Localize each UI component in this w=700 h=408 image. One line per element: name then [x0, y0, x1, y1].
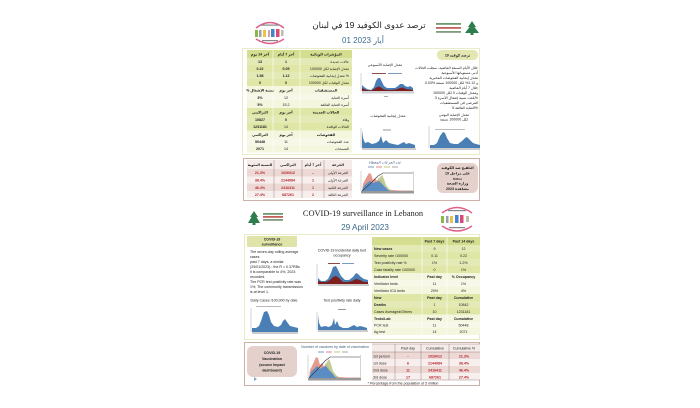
text block: Arabic summary: المرضى في المستشفيات	[440, 101, 478, 105]
table: English indicators: 1	[434, 303, 436, 307]
table: English indicators: Tests/Lab	[374, 317, 391, 321]
table: Arabic indicators: 1.12	[282, 74, 290, 78]
chart: incidence and severity: occupancy	[333, 254, 351, 258]
table: English indicators: 0	[434, 268, 436, 272]
Arabic report date: 01 أيار 2023	[342, 35, 384, 45]
table: English indicators: Ag test	[374, 330, 385, 334]
heading: COVID-19 surveillance: COVID-19	[264, 238, 280, 242]
chart: incidence and severity: COVID-19 Incidental daily bed	[318, 248, 366, 252]
table: Arabic indicators: 0	[259, 81, 261, 85]
table: Arabic indicators: حالات جديدة	[330, 60, 349, 64]
table: Arabic vaccination doses	[247, 160, 352, 198]
text block: Arabic summary: خلال الأيام السبعة الماضية، سجلت الحالات	[415, 65, 478, 71]
table: vaccination doses: 38.4%	[459, 362, 470, 366]
text block: English summary: it is comparable to 4%, 2023	[250, 270, 295, 274]
table: Arabic indicators: 0	[285, 81, 287, 85]
table: Arabic indicators: آخر 7 أيام	[278, 52, 295, 56]
text block: English summary: cases	[250, 255, 260, 259]
table: Arabic vaccination doses: الجرعة الثانية	[328, 186, 348, 190]
text block: Arabic summary: العناية الفائقة 5%	[452, 106, 479, 110]
table: Arabic indicators: آخر يوم	[279, 88, 293, 92]
text block: Arabic summary: أدنى مستوياتها الأسبوعية	[441, 70, 478, 75]
table: Arabic vaccination doses: التراكمي	[280, 163, 296, 167]
chart: Arabic vaccination doses	[361, 160, 414, 194]
chart: number of vaccines: Number of vaccines by date of vaccination	[301, 345, 369, 349]
table: English indicators: 9	[434, 247, 436, 251]
callout: COVID-19 vaccination: (source Impact	[259, 363, 286, 367]
callout: Arabic vaccination: مشاهدة 2023	[446, 187, 469, 191]
table: Arabic vaccination doses: 2	[312, 193, 314, 197]
table: Arabic indicators: أسرة العناية	[331, 95, 349, 100]
table: vaccination doses	[372, 344, 480, 380]
table: Arabic indicators	[246, 50, 352, 152]
table: English indicators: New cases	[374, 247, 392, 251]
table: Arabic indicators: التراكمي	[252, 133, 268, 137]
panel: Arabic surveillance	[242, 48, 480, 154]
table: Arabic vaccination doses: 38.4%	[255, 178, 266, 182]
table: vaccination doses: 11	[406, 368, 410, 372]
table: Arabic vaccination doses: 21.3%	[255, 171, 266, 175]
table: Arabic indicators: عدد الفحوصات	[327, 140, 349, 144]
table: English indicators: 0.22	[460, 254, 467, 258]
text block: English summary: The seven-day rolling average	[250, 250, 298, 254]
chart: daily cases Arabic	[429, 113, 480, 150]
table: Arabic indicators: 1	[285, 60, 287, 64]
table: Arabic vaccination doses: الجرعة الأولى	[328, 178, 348, 182]
table: Arabic indicators: الحالات الجديدة	[313, 110, 339, 114]
table: Arabic indicators: المسحات	[335, 147, 349, 151]
chart: incidence and severity Arabic	[361, 62, 414, 97]
table: vaccination doses: 6	[407, 362, 409, 366]
callout: Arabic vaccination: 19 على مراحل	[445, 172, 471, 176]
text block: English summary: recorded.	[250, 275, 265, 279]
table: Arabic indicators: 14	[284, 147, 288, 151]
table: English indicators: 14	[432, 330, 436, 334]
table: English indicators: 1231181	[457, 310, 470, 314]
chart: daily cases per 100,000: Daily Cases /100,000 by date	[251, 298, 297, 302]
table: vaccination doses: 1026012	[428, 354, 442, 358]
table: English indicators: 0.11	[431, 254, 438, 258]
table: English indicators: 1%	[432, 261, 438, 265]
table: Arabic indicators: آخر 14 يوم	[251, 52, 270, 56]
table: English indicators: Case fatality rate /100000	[374, 268, 415, 272]
table: vaccination doses: 1st person	[373, 354, 390, 358]
table: English indicators: 1.2%	[459, 261, 468, 265]
table: English indicators: Ventilator beds	[374, 282, 398, 286]
callout: COVID-19 vaccination: COVID-19	[264, 351, 280, 355]
table: Arabic vaccination doses: 687261	[282, 193, 294, 197]
date: English: 29 April 2023	[341, 223, 389, 232]
text block: Arabic summary	[415, 65, 479, 110]
table: English indicators: 50448	[458, 324, 468, 328]
table: Arabic indicators: 0	[285, 118, 287, 122]
table: Arabic vaccination doses: النسبة المئوية	[248, 163, 272, 167]
table: Arabic indicators: 0.05	[282, 67, 290, 71]
table: English indicators: Past 7 days	[425, 240, 444, 244]
table: English indicators: 2071	[460, 330, 468, 334]
table: English indicators: Past day	[427, 275, 442, 279]
table: Arabic indicators: 12	[284, 96, 288, 100]
table: vaccination doses: Past day	[401, 346, 415, 350]
table: Arabic indicators: 10827	[255, 118, 265, 122]
callout: Arabic vaccination	[437, 163, 478, 193]
chart: number of vaccines	[301, 345, 369, 380]
table: Arabic vaccination doses: 1	[312, 178, 314, 182]
table: English indicators: Past day	[427, 317, 442, 321]
text block: English summary: (29/01/2023) : the R = 0.37RBs	[250, 265, 300, 269]
callout: COVID-19 vaccination: dashboard)	[262, 368, 283, 372]
logo: campaign oval top	[255, 22, 284, 44]
table: Arabic indicators: معدل الإصابة لكل 100000	[310, 67, 349, 72]
panel: English vaccination	[244, 342, 480, 386]
text block: English summary	[250, 250, 303, 294]
table: English indicators: Cases Averaged/Others	[374, 310, 412, 314]
table: Arabic vaccination doses: 46.4%	[255, 186, 266, 190]
table: vaccination doses: 2nd dose	[373, 368, 388, 372]
table: Arabic vaccination doses: –	[312, 171, 314, 175]
table: vaccination doses: 21.3%	[459, 354, 470, 358]
panel: Arabic vaccination	[244, 158, 480, 200]
table: vaccination doses: 687261	[429, 376, 441, 380]
table: English indicators: Past 14 days	[453, 240, 474, 244]
table: English indicators: 4%	[461, 289, 467, 293]
table: vaccination doses: 27.4%	[459, 376, 470, 380]
Arabic report title: ترصد عدوى الكوفيد 19 في لبنان	[312, 20, 426, 30]
table: English indicators: Test positivity rate %	[374, 261, 408, 265]
callout: COVID-19 vaccination: Vaccination	[262, 357, 282, 361]
heading: Arabic COVID-19 surveillance pill: ترصد كوفيد 19	[445, 54, 471, 58]
chart: positivity rate Arabic	[361, 114, 416, 150]
text block: English summary: 1%; The community transmission	[250, 285, 303, 289]
text block: English summary: is at level 1.	[250, 290, 269, 294]
footnote: * Percentage from the population of 5 million	[368, 382, 438, 386]
table: Arabic indicators: معدل إيجابية الفحوصات %	[310, 74, 350, 79]
callout: Arabic vaccination: منصة	[453, 176, 462, 180]
table: Arabic indicators: أسرة العناية الفائقة	[320, 102, 349, 107]
table: Arabic vaccination doses: الجرعة الأولى	[328, 170, 348, 175]
table: English indicators: 1%	[461, 268, 467, 272]
table: Arabic vaccination doses: الجرعة الثالثة	[328, 193, 348, 197]
table: vaccination doses: 46.4%	[459, 368, 470, 372]
chart: daily cases Arabic: معدل الإصابة اليومي	[439, 113, 469, 118]
title: English: COVID-19 surveillance in Lebanon	[303, 209, 424, 218]
text block: Arabic summary: معدل إيجابية الفحوصات المخبرية	[429, 76, 478, 81]
chart: test positivity: Test positivity rate daily	[324, 298, 361, 302]
table: English indicators: 10	[432, 310, 436, 314]
table: Arabic indicators: المؤشرات الوبائية	[310, 52, 342, 56]
text block: Arabic summary: خلال 7 أيام الماضية	[449, 85, 478, 91]
table: Arabic vaccination doses: 1	[312, 186, 314, 190]
table: Arabic indicators: 3%	[257, 96, 263, 100]
table: Arabic indicators: وفاة	[343, 118, 349, 122]
heading: Arabic COVID-19 surveillance pill	[437, 50, 478, 60]
table: vaccination doses: -	[407, 354, 409, 358]
table: Arabic indicators: % نسبة الإشغال	[246, 88, 275, 92]
table: vaccination doses: 1st dose	[373, 362, 387, 366]
table: Arabic indicators: التراكمي	[252, 110, 268, 114]
table: English indicators: PCR test	[374, 324, 388, 328]
table: English indicators: Ventilator ICU beds	[374, 289, 405, 293]
table: Arabic vaccination doses: الجرعة	[332, 163, 344, 167]
logo: ministry of health top	[436, 21, 479, 35]
table: vaccination doses: Cumulative	[426, 346, 444, 350]
chart: Arabic vaccination doses: عدد الجرعات المعطاة	[369, 160, 401, 164]
table: English indicators: 11	[433, 282, 436, 286]
table: vaccination doses: 2416411	[428, 368, 442, 372]
table: Arabic vaccination doses: 2416411	[281, 186, 295, 190]
panel: English surveillance	[244, 234, 480, 340]
table: Arabic indicators: 0.22	[256, 67, 264, 71]
text block: English summary: past 7 days, a similar	[250, 260, 285, 264]
table: English indicators: Cumulative	[454, 296, 473, 300]
table: English indicators: Deaths	[374, 303, 386, 307]
icon: small arrow	[254, 377, 257, 381]
chart: daily cases per 100,000	[251, 298, 298, 334]
table: English indicators: 12	[462, 247, 466, 251]
table: Arabic vaccination doses: 1026012	[281, 171, 295, 175]
table: Arabic indicators: 2071	[256, 147, 264, 151]
chart: incidence and severity Arabic: معدل الإصابة الأسبوعي	[368, 62, 402, 68]
table: English indicators: New	[374, 296, 382, 300]
logo: campaign oval bottom	[441, 208, 472, 231]
chart: test positivity	[317, 298, 368, 332]
table: English indicators	[372, 237, 480, 335]
logo: ministry of health bottom	[248, 211, 283, 225]
table: Arabic indicators: 11	[284, 140, 288, 144]
callout: COVID-19 vaccination	[247, 346, 297, 377]
table: Arabic indicators: الفحوصات	[317, 133, 335, 137]
table: Arabic vaccination doses: 2144084	[281, 178, 295, 182]
table: vaccination doses: 3rd dose	[373, 376, 387, 380]
table: Arabic indicators: 14	[284, 125, 288, 129]
table: English indicators: Indicator level	[374, 275, 398, 279]
table: vaccination doses: Cumulative %	[453, 346, 476, 350]
table: Arabic indicators: المستشفيات	[315, 88, 337, 92]
chart: incidence and severity	[317, 248, 369, 286]
table: Arabic indicators: آخر يوم	[279, 110, 293, 114]
callout: Arabic vaccination: وزارة الصحة	[447, 182, 468, 186]
table: Arabic indicators: 13	[258, 60, 262, 64]
table: English indicators: 20%	[431, 289, 439, 293]
text block: Arabic summary: ومعدل الوفيات 0 لكل 100000	[433, 91, 478, 95]
table: Arabic vaccination doses: آخر 7 أيام	[305, 162, 322, 167]
table: English indicators: 11	[433, 324, 436, 328]
table: Arabic indicators: الحالات الوافدة	[327, 125, 349, 129]
text block: Arabic summary: 0.03% و 1.12% لكل 100000 نسمة	[425, 81, 478, 85]
chart: positivity rate Arabic: معدل إيجابية الفحوصات	[370, 114, 406, 119]
heading: COVID-19 surveillance	[247, 236, 297, 247]
table: English indicators: Severity rate /100000	[374, 254, 408, 258]
chart: daily cases Arabic: لكل 100000 نسمة	[440, 118, 468, 122]
table: English indicators: Cumulative	[454, 317, 473, 321]
table: Arabic vaccination doses: 27.4%	[255, 193, 266, 197]
table: vaccination doses: 17	[406, 376, 410, 380]
table: Arabic indicators: 5%	[257, 103, 263, 107]
table: English indicators: 1%	[461, 282, 467, 286]
table: Arabic indicators: 1.58	[256, 74, 264, 78]
table: Arabic indicators: معدل الوفيات لكل 100000	[309, 81, 349, 85]
table: Arabic indicators: 15.2	[282, 103, 290, 107]
heading: COVID-19 surveillance: surveillance	[262, 242, 282, 246]
table: Arabic indicators: 1231181	[253, 125, 267, 129]
table: English indicators: Past day	[427, 296, 442, 300]
text block: English summary: The PCR test positivity rate was	[250, 280, 301, 284]
table: Arabic indicators: 50448	[255, 140, 265, 144]
table: English indicators: 10842	[458, 303, 468, 307]
table: Arabic indicators: آخر يوم	[279, 132, 293, 137]
table: English indicators: % Occupancy	[452, 275, 475, 279]
text block: Arabic summary: بلغت نسبة إشغال الأسرة 3%	[435, 95, 479, 101]
callout: Arabic vaccination: التلقيح ضد الكوفيد	[441, 166, 474, 170]
table: vaccination doses: 2144084	[428, 362, 442, 366]
